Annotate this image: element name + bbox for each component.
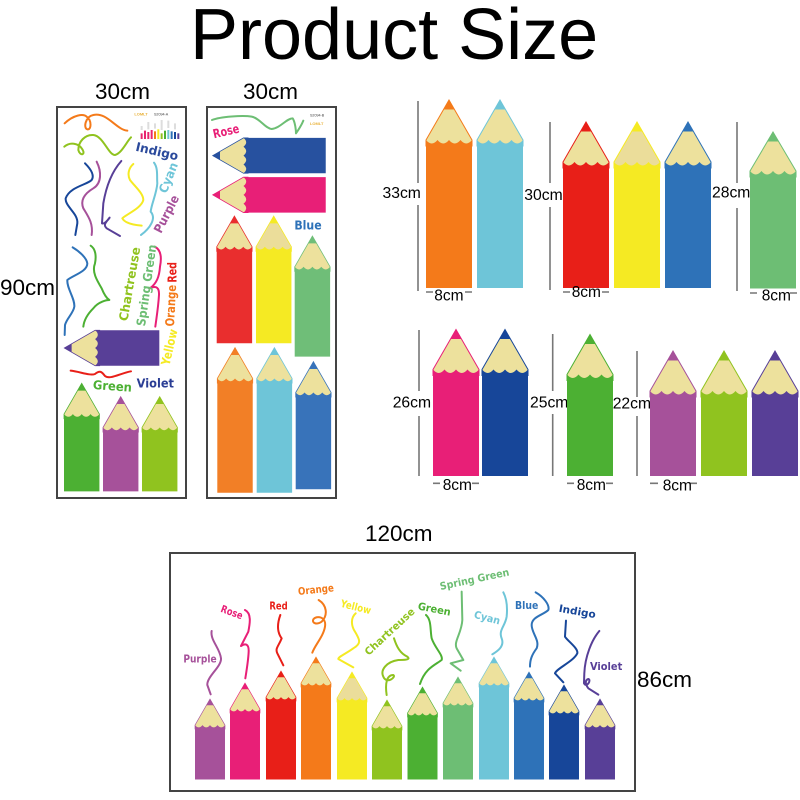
sheet A colour names, top: Purple: [151, 193, 182, 235]
spring green pencil: [443, 677, 473, 779]
panel: 26cm pencils: [393, 330, 528, 494]
chartreuse pencil: [372, 700, 402, 780]
violet pencil: [752, 351, 798, 476]
sheet B cyan pencil: [257, 348, 292, 493]
sheet A brand marks: LOMLT: [134, 112, 148, 117]
sheet B frame: [207, 107, 336, 498]
sheet B brand marks: [310, 114, 325, 126]
colour names, right half: Blue: [515, 600, 538, 612]
colour names, left half: Yellow: [338, 598, 373, 617]
width dimension ticks: [650, 482, 697, 484]
8cm label: 8cm: [434, 288, 464, 305]
height dimension line: [417, 101, 419, 291]
colour names, left half: Purple: [183, 654, 217, 666]
sheet A width label: 30cm: [95, 79, 150, 104]
colour names, right half: Green: [417, 600, 452, 619]
sheet B blue pencil: [296, 362, 331, 489]
sheet A colour names, top: Indigo: [134, 140, 180, 163]
height dimension line: [418, 330, 420, 476]
25cm label: 25cm: [530, 394, 568, 411]
bottom panel frame: [170, 553, 635, 791]
colour names, right half: Violet: [590, 661, 622, 673]
sheet B red pencil: [217, 216, 252, 343]
30cm label: 30cm: [524, 187, 563, 204]
sheet A colour names, middle: [116, 244, 180, 327]
indigo pencil: [549, 685, 579, 779]
purple pencil: [195, 699, 225, 780]
chartreuse pencil: [701, 351, 747, 476]
orange pencil: [301, 657, 331, 780]
sheet A squiggles, middle: [65, 246, 161, 335]
cyan pencil: [479, 657, 509, 780]
sheet A colour names, bottom: Yellow: [158, 328, 180, 367]
sheet A frame: [57, 107, 186, 498]
sheet A colour names, middle: Spring Green: [134, 244, 159, 327]
26cm label: 26cm: [393, 394, 431, 411]
colour names, right half: Spring Green: [439, 567, 510, 593]
height dimension line: [636, 351, 638, 476]
sheet A green pencil: [64, 383, 99, 491]
spring green pencil: [750, 132, 796, 288]
blue pencil: [665, 122, 711, 288]
8cm label: 8cm: [663, 478, 692, 495]
sheet B spring green pencil: [295, 236, 330, 357]
squiggles, right half: [420, 592, 599, 695]
28cm label: 28cm: [712, 185, 750, 202]
sheet B horizontal blue pencil: [213, 138, 326, 173]
rose pencil: [433, 330, 479, 476]
red pencil: [563, 122, 609, 288]
8cm label: 8cm: [572, 284, 601, 301]
sheet A brand marks: [134, 112, 179, 139]
33cm label: 33cm: [382, 185, 421, 202]
height dimension line: [549, 122, 551, 290]
width dimension ticks: [426, 291, 472, 293]
sheet A purple pencil: [103, 397, 138, 491]
sheet A colour names, top: Cyan: [156, 161, 181, 195]
sheet B yellow pencil: [256, 216, 291, 343]
colour names, right half: Indigo: [558, 603, 597, 621]
panel: 28cm pencil: [712, 122, 797, 305]
sheet A chartreuse pencil: [142, 397, 177, 491]
panel: 30cm pencils: [524, 122, 711, 301]
colour names, left half: Red: [269, 600, 288, 612]
sheet B colour names: [212, 122, 322, 232]
panel: bottom pencil row: [170, 521, 692, 791]
panel: 25cm pencil: [530, 334, 613, 494]
sheet B horizontal rose pencil: [213, 177, 326, 213]
width dimension ticks: [433, 482, 479, 484]
colour names, left half: Rose: [219, 603, 244, 622]
colour names, left half: Orange: [297, 582, 334, 598]
sheet B orange pencil: [217, 348, 253, 493]
sheet B width label: 30cm: [243, 79, 298, 104]
sheet A red squiggle: [71, 371, 131, 377]
sheet A squiggles, top: [64, 115, 157, 236]
blue pencil: [514, 672, 544, 780]
panel: left sticker sheet B: [207, 79, 336, 498]
width dimension ticks: [563, 291, 609, 293]
panel: 33cm pencils: [382, 100, 523, 305]
sheet A colour names, middle: Orange: [163, 284, 179, 327]
purple pencil: [650, 351, 696, 476]
red pencil: [266, 671, 296, 779]
sheet A colour names, bottom: [92, 328, 180, 395]
cyan pencil: [477, 100, 523, 288]
sheet A colour names, top: [134, 140, 182, 235]
violet pencil: [585, 699, 615, 780]
sheet B colour names: Blue: [294, 218, 322, 232]
indigo pencil: [482, 330, 528, 476]
sheet A colour names, bottom: Violet: [137, 376, 174, 390]
green pencil: [567, 334, 613, 476]
86cm label: 86cm: [637, 667, 692, 692]
sheet A height label: 90cm: [0, 275, 55, 300]
8cm label: 8cm: [762, 288, 791, 305]
sheet A colour names, bottom: Green: [92, 378, 132, 395]
sheet B green squiggle: [212, 116, 303, 133]
sheet A colour names, middle: Chartreuse: [116, 246, 143, 322]
colour names, right half: Cyan: [473, 609, 501, 627]
sheet B colour names: Rose: [212, 122, 241, 141]
yellow pencil: [614, 122, 660, 288]
8cm label: 8cm: [577, 477, 606, 494]
green pencil: [408, 687, 437, 780]
colour names, left half: Chartreuse: [363, 606, 417, 658]
height dimension line: [736, 122, 738, 291]
width dimension ticks: [567, 482, 613, 484]
height dimension line: [552, 334, 554, 476]
colour names, right half: [417, 567, 622, 673]
sheet A colour names, middle: Red: [166, 262, 180, 283]
width dimension ticks: [750, 292, 797, 294]
sheet B brand marks: LOMLT: [310, 121, 324, 126]
yellow pencil: [337, 672, 367, 780]
22cm label: 22cm: [613, 395, 651, 412]
rose pencil: [230, 683, 260, 779]
panel: left sticker sheet A: [0, 79, 186, 498]
120cm label: 120cm: [365, 521, 433, 546]
sheet A horizontal violet pencil: [64, 330, 159, 366]
colour names, left half: [183, 582, 417, 666]
panel: 22cm pencils: [613, 351, 798, 495]
8cm label: 8cm: [443, 477, 472, 494]
squiggles, left half: [207, 600, 409, 695]
sheet B brand marks: S2094-B: [310, 114, 325, 118]
sheet A brand marks: S2094-A: [154, 113, 169, 117]
orange pencil: [426, 100, 472, 288]
